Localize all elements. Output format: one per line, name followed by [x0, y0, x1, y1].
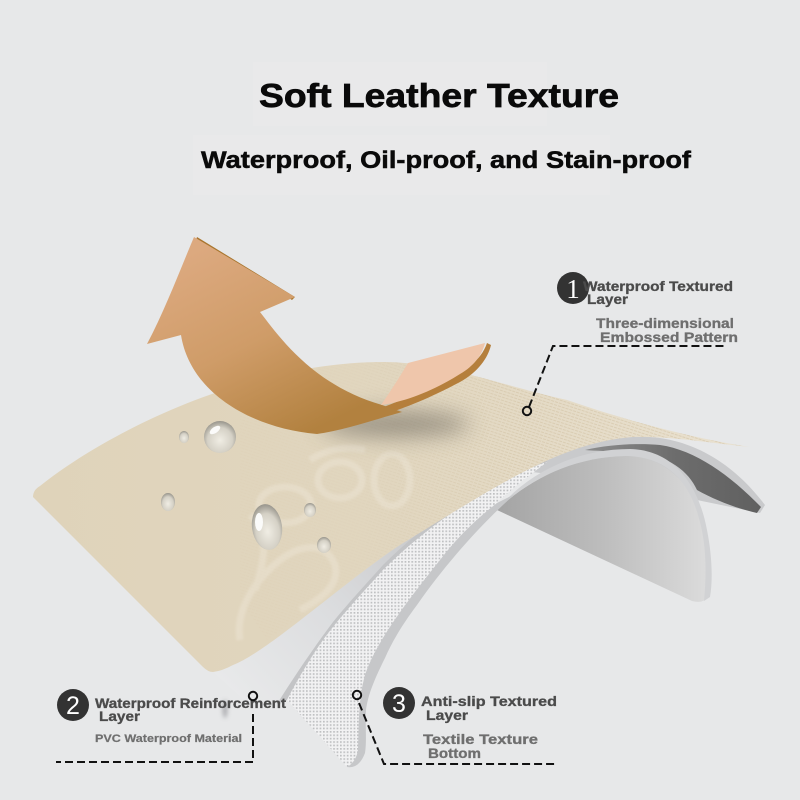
woven texture: [414, 376, 741, 534]
shadow below arrow: [320, 411, 470, 437]
badge 3: [383, 687, 415, 719]
description 2: PVC Waterproof Material: [95, 733, 242, 745]
textured layer outer rim: [347, 494, 515, 767]
heading 3: Anti-slip Textured: [421, 694, 557, 709]
title: Soft Leather Texture: [259, 77, 619, 114]
heading 1: [583, 279, 733, 307]
heading 1: Layer: [587, 292, 629, 307]
heading 3: [421, 694, 557, 723]
icon: peeling arrow: [147, 237, 491, 434]
badge 3: 3: [392, 690, 406, 718]
heading 3: Layer: [426, 708, 469, 723]
heading 1: Waterproof Textured: [583, 279, 733, 294]
badge 2: [57, 689, 89, 721]
embossed floral pattern: [239, 448, 410, 640]
water droplets: [161, 421, 331, 553]
description 1: Embossed Pattern: [600, 330, 738, 345]
heading 2: [95, 696, 287, 724]
description 1: Three-dimensional: [596, 316, 734, 331]
description 3: [423, 732, 539, 761]
heading 2: Layer: [99, 709, 141, 724]
heading 2: Waterproof Reinforcement: [95, 696, 287, 711]
grey stripe beside textured layer: [277, 457, 547, 704]
callout 1: waterproof textured layer: [523, 272, 738, 415]
leader line 2: [56, 692, 257, 762]
callout 3: anti-slip textured layer: [353, 687, 557, 764]
callout 2: waterproof reinforcement layer: [56, 689, 287, 762]
peach reverse side of arrow: [381, 343, 485, 405]
badge 1: [557, 272, 589, 304]
subtitle: Waterproof, Oil-proof, and Stain-proof: [201, 147, 692, 174]
description 3: Bottom: [428, 746, 481, 761]
dark underside of reinforcement layer: [585, 444, 761, 513]
title: [253, 62, 619, 126]
light arch rim: [497, 449, 712, 601]
smudge 2: [222, 700, 228, 718]
leader line 3: [353, 691, 556, 764]
description 3: Textile Texture: [423, 732, 539, 747]
reinforcement layer band: [213, 437, 765, 712]
leader line 1: [523, 346, 724, 415]
description 1: [596, 316, 738, 345]
badge 1: 1: [566, 274, 580, 304]
material layers illustration: [33, 362, 765, 767]
tan waterproof textured layer: [33, 362, 750, 672]
anti-slip textured layer: [287, 462, 547, 767]
inner arch underside: [497, 456, 710, 602]
subtitle: [193, 135, 692, 195]
badge 2: 2: [66, 692, 80, 720]
